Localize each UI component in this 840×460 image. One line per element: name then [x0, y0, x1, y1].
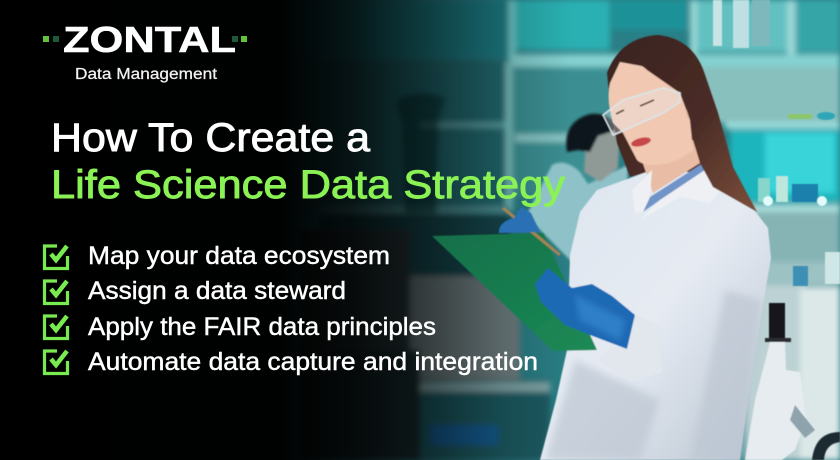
coat shading — [545, 290, 762, 460]
item 3 — [44, 313, 436, 341]
item text 2: Assign a data steward — [88, 277, 346, 305]
check icon 1 — [44, 246, 68, 268]
lab coat — [540, 168, 771, 460]
title line 1: How To Create a — [51, 116, 371, 160]
safety goggles — [603, 88, 680, 135]
upper glove — [499, 207, 540, 233]
sleeve cuff — [598, 315, 662, 382]
logo wordmark: ZONTAL — [63, 19, 236, 60]
logo pixels left — [43, 36, 59, 42]
check icon 2 — [44, 281, 68, 304]
item text 4: Automate data capture and integration — [88, 348, 538, 376]
check icon 3 — [44, 316, 68, 338]
hair behind the face — [607, 35, 757, 212]
lips — [630, 136, 652, 148]
microscope — [745, 303, 840, 460]
logo — [43, 19, 247, 83]
front hair strand — [607, 35, 757, 212]
item text 1: Map your data ecosystem — [88, 242, 390, 270]
closed eyes — [616, 100, 654, 114]
checklist — [44, 242, 538, 376]
check icon 4 — [44, 351, 68, 374]
item 1 — [44, 242, 390, 270]
plant silhouette — [396, 93, 445, 215]
title line 2: Life Science Data Strategy — [51, 163, 565, 207]
coat collar — [632, 168, 723, 220]
clipboard — [432, 233, 597, 351]
neck — [640, 140, 700, 193]
logo subtitle: Data Management — [75, 66, 218, 83]
background colleague in lab coat — [526, 114, 628, 300]
item 2 — [44, 277, 346, 305]
blue shirt collar — [643, 163, 708, 212]
logo pixels right — [232, 36, 247, 42]
scientist — [432, 35, 771, 460]
face — [609, 62, 693, 165]
ear — [686, 106, 692, 118]
item 4 — [44, 348, 538, 376]
pencil — [503, 208, 560, 255]
lower glove — [535, 268, 635, 349]
item text 3: Apply the FAIR data principles — [88, 313, 436, 341]
